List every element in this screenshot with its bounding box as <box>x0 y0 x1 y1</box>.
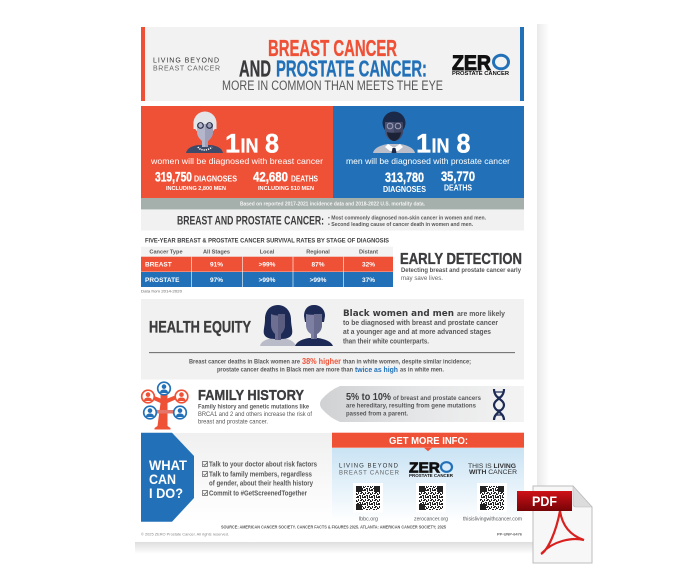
text: death rates: as in white men. <box>400 367 444 374</box>
logo: ZERO small: ZER <box>409 460 440 476</box>
callout: hereditary cancers: passed from a parent. <box>346 411 408 418</box>
icon: black woman and man <box>260 305 333 346</box>
banner: get more info <box>332 433 524 451</box>
data note strip <box>141 198 524 210</box>
title: MORE IN COMMON THAN MEETS THE EYE <box>222 78 443 93</box>
text: men diagnosed: men will be diagnosed with prostate cancer <box>346 156 510 166</box>
text: women diagnosed: women will be diagnosed with breast cancer <box>150 156 323 166</box>
panel: breast cancer statistics <box>141 106 333 198</box>
stat: breast diagnoses <box>155 169 238 192</box>
paper shadow <box>135 24 549 554</box>
badge: what can I do: CAN <box>149 471 176 487</box>
links <box>359 517 522 523</box>
checklist: Talk to family members, regardless <box>209 470 312 479</box>
text: death rates: than in white women, despite similar incidence; <box>343 359 471 366</box>
text: death rates: 38% higher <box>302 357 341 366</box>
text: death rates <box>189 357 471 374</box>
stat: 1 in 8 women: IN <box>240 136 258 158</box>
title <box>222 35 443 93</box>
checklist: of gender, about their health history <box>209 479 313 488</box>
stat: 1 in 8 men: 1 <box>416 129 431 159</box>
PDF banner: PDF <box>532 493 557 509</box>
logo: Living Beyond Breast Cancer small: LIVING BEYOND <box>339 463 399 469</box>
panel: breast and prostate cancer facts <box>141 210 524 230</box>
table: survival rates: All Stages <box>203 250 230 256</box>
table: survival rates: Cancer Type <box>149 250 183 256</box>
document code: PP-UNP-6476 <box>497 531 523 536</box>
header panel <box>141 27 524 101</box>
stat: 1 in 8 women: 8 <box>265 129 279 159</box>
icon: PDF document <box>517 486 592 563</box>
table: survival rates: 32% <box>362 262 375 269</box>
stat: prostate deaths: 35,770 <box>441 168 475 184</box>
badge: what can I do: I DO? <box>149 485 183 501</box>
checklist: Commit to #GetScreenedTogether <box>209 489 307 498</box>
copyright: © 2025 ZERO Prostate Cancer. All rights reserved. <box>141 531 229 536</box>
panel: get more info <box>332 433 524 523</box>
callout: hereditary cancers: of breast and prostate cancers <box>393 395 481 402</box>
table: survival rates: >99% <box>310 277 327 284</box>
table: survival rates: Data from 2014-2020 <box>141 288 183 293</box>
text block: family history: breast and prostate cancer. <box>198 419 268 426</box>
stat: 1 in 8 men: 8 <box>456 129 470 159</box>
table: survival rates: Distant <box>359 250 378 256</box>
panel: what can I do <box>141 433 333 522</box>
icon: woman <box>186 112 223 153</box>
source line: SOURCE: AMERICAN CANCER SOCIETY. CANCER FACTS & FIGURES 2025. ATLANTA: AMERICAN CANCER SOCIETY; 2025 <box>221 525 447 530</box>
banner: get more info: GET MORE INFO: <box>389 435 468 447</box>
links: lbbc.org <box>359 517 378 523</box>
logo: This Is Living With Cancer: THIS IS LIVING <box>468 464 516 470</box>
table: survival rates: 91% <box>210 262 223 269</box>
QR code: zerocancer.org <box>416 483 446 512</box>
text: disparity summary: to be diagnosed with breast and prostate cancer <box>343 318 498 327</box>
stat: breast deaths <box>253 169 319 192</box>
badge: what can I do <box>141 433 194 522</box>
panel: breast and prostate cancer facts: • Second leading cause of cancer death in women and men. <box>328 222 473 228</box>
text block: family history <box>198 387 312 426</box>
table: survival rates: >99% <box>259 262 276 269</box>
callout: hereditary cancers <box>320 386 524 422</box>
icon: man <box>373 112 415 153</box>
callout: hereditary cancers: 5% to 10% <box>346 392 391 403</box>
stat: 1 in 8 women: 1 <box>225 129 240 159</box>
text block: early detection: Detecting breast and prostate cancer early <box>401 267 521 274</box>
stat: breast deaths: INCLUDING 510 MEN <box>258 186 314 192</box>
text block: family history: Family history and genetic mutations like <box>198 403 309 410</box>
stat: breast deaths: DEATHS <box>291 175 319 184</box>
acrobat mark <box>541 511 584 554</box>
stat: prostate deaths <box>441 168 475 192</box>
heading: survival rates: FIVE-YEAR BREAST & PROSTATE CANCER SURVIVAL RATES BY STAGE OF DIAGNOSIS <box>145 238 390 245</box>
stat: prostate diagnoses: DIAGNOSES <box>383 184 426 194</box>
title: PROSTATE CANCER: <box>276 56 427 82</box>
badge: what can I do: WHAT <box>149 457 187 473</box>
logo: ZERO Prostate Cancer <box>452 52 509 77</box>
table: survival rates: BREAST <box>145 262 172 269</box>
title: BREAST CANCER <box>268 35 397 61</box>
stat: prostate diagnoses <box>383 169 426 194</box>
table: survival rates: 37% <box>362 277 375 284</box>
links: zerocancer.org <box>414 517 448 523</box>
title: AND <box>239 56 271 82</box>
text: disparity summary: at a younger age and at more advanced stages <box>343 327 491 336</box>
text: disparity summary: are more likely <box>457 309 506 318</box>
stat: breast diagnoses: DIAGNOSES <box>194 175 238 184</box>
panel: breast and prostate cancer facts: BREAST AND PROSTATE CANCER: <box>177 214 324 228</box>
text block: early detection: may save lives. <box>401 275 443 282</box>
logo: This Is Living With Cancer <box>468 464 518 476</box>
text: death rates: twice as high <box>355 365 398 374</box>
callout: hereditary cancers: are hereditary, resulting from gene mutations <box>346 403 476 410</box>
table: survival rates: Local <box>260 250 275 256</box>
stat: breast deaths: 42,680 <box>253 169 288 185</box>
logo: Living Beyond Breast Cancer: BREAST CANCER <box>153 66 220 72</box>
text block: early detection <box>400 251 522 282</box>
table: survival rates: 97% <box>210 277 223 284</box>
checklist <box>202 460 317 498</box>
stat: 1 in 8 men <box>416 129 470 159</box>
text: death rates: Breast cancer deaths in Black women are <box>189 359 300 366</box>
panel: health equity <box>141 299 524 380</box>
stat: breast diagnoses: INCLUDING 2,800 MEN <box>166 186 226 192</box>
icon: DNA <box>494 389 504 420</box>
logo: ZERO Prostate Cancer: PROSTATE CANCER <box>452 71 509 77</box>
stat: prostate diagnoses: 313,780 <box>385 169 424 185</box>
table: survival rates <box>141 247 393 293</box>
links: thisislivingwithcancer.com <box>463 517 522 523</box>
text: disparity summary: than their white counterparts. <box>343 337 429 346</box>
logo: ZERO small <box>409 460 453 478</box>
icon: family tree <box>142 382 188 430</box>
panel: prostate cancer statistics <box>333 106 524 198</box>
checklist: Talk to your doctor about risk factors <box>209 460 317 469</box>
logo: Living Beyond Breast Cancer small: BREAST CANCER <box>339 470 400 476</box>
text: death rates: prostate cancer deaths in Black men are more than <box>217 367 353 374</box>
text block: family history: FAMILY HISTORY <box>198 387 304 404</box>
logo: Living Beyond Breast Cancer: LIVING BEYOND <box>153 58 219 65</box>
table: survival rates: Regional <box>306 250 330 256</box>
panel: breast and prostate cancer facts: • Most commonly diagnosed non-skin cancer in women and men. <box>328 216 486 222</box>
stat: 1 in 8 women <box>225 129 279 159</box>
QR code: lbbc.org <box>353 483 383 512</box>
table: survival rates: PROSTATE <box>145 277 180 284</box>
logo: Living Beyond Breast Cancer <box>153 58 220 72</box>
data note strip: Based on reported 2017-2021 incidence data and 2018-2022 U.S. mortality data. <box>240 202 426 208</box>
stat: prostate deaths: DEATHS <box>444 182 472 192</box>
text block: early detection: EARLY DETECTION <box>400 251 522 268</box>
heading: health equity: HEALTH EQUITY <box>149 318 251 337</box>
logo: This Is Living With Cancer: WITH CANCER <box>469 470 518 476</box>
logo: ZERO small: PROSTATE CANCER <box>409 473 453 478</box>
stat: breast diagnoses: 319,750 <box>155 169 192 185</box>
QR code: thisislivingwithcancer.com <box>477 483 507 512</box>
logo: Living Beyond Breast Cancer small <box>339 463 400 476</box>
text block: family history: BRCA1 and 2 and others increase the risk of <box>198 411 312 418</box>
text: disparity summary <box>343 309 506 346</box>
stat: 1 in 8 men: IN <box>432 136 450 158</box>
table: survival rates: >99% <box>259 277 276 284</box>
table: survival rates: 87% <box>311 262 325 269</box>
logo: ZERO Prostate Cancer: ZER <box>452 52 491 75</box>
text: disparity summary: Black women and men <box>343 309 454 319</box>
